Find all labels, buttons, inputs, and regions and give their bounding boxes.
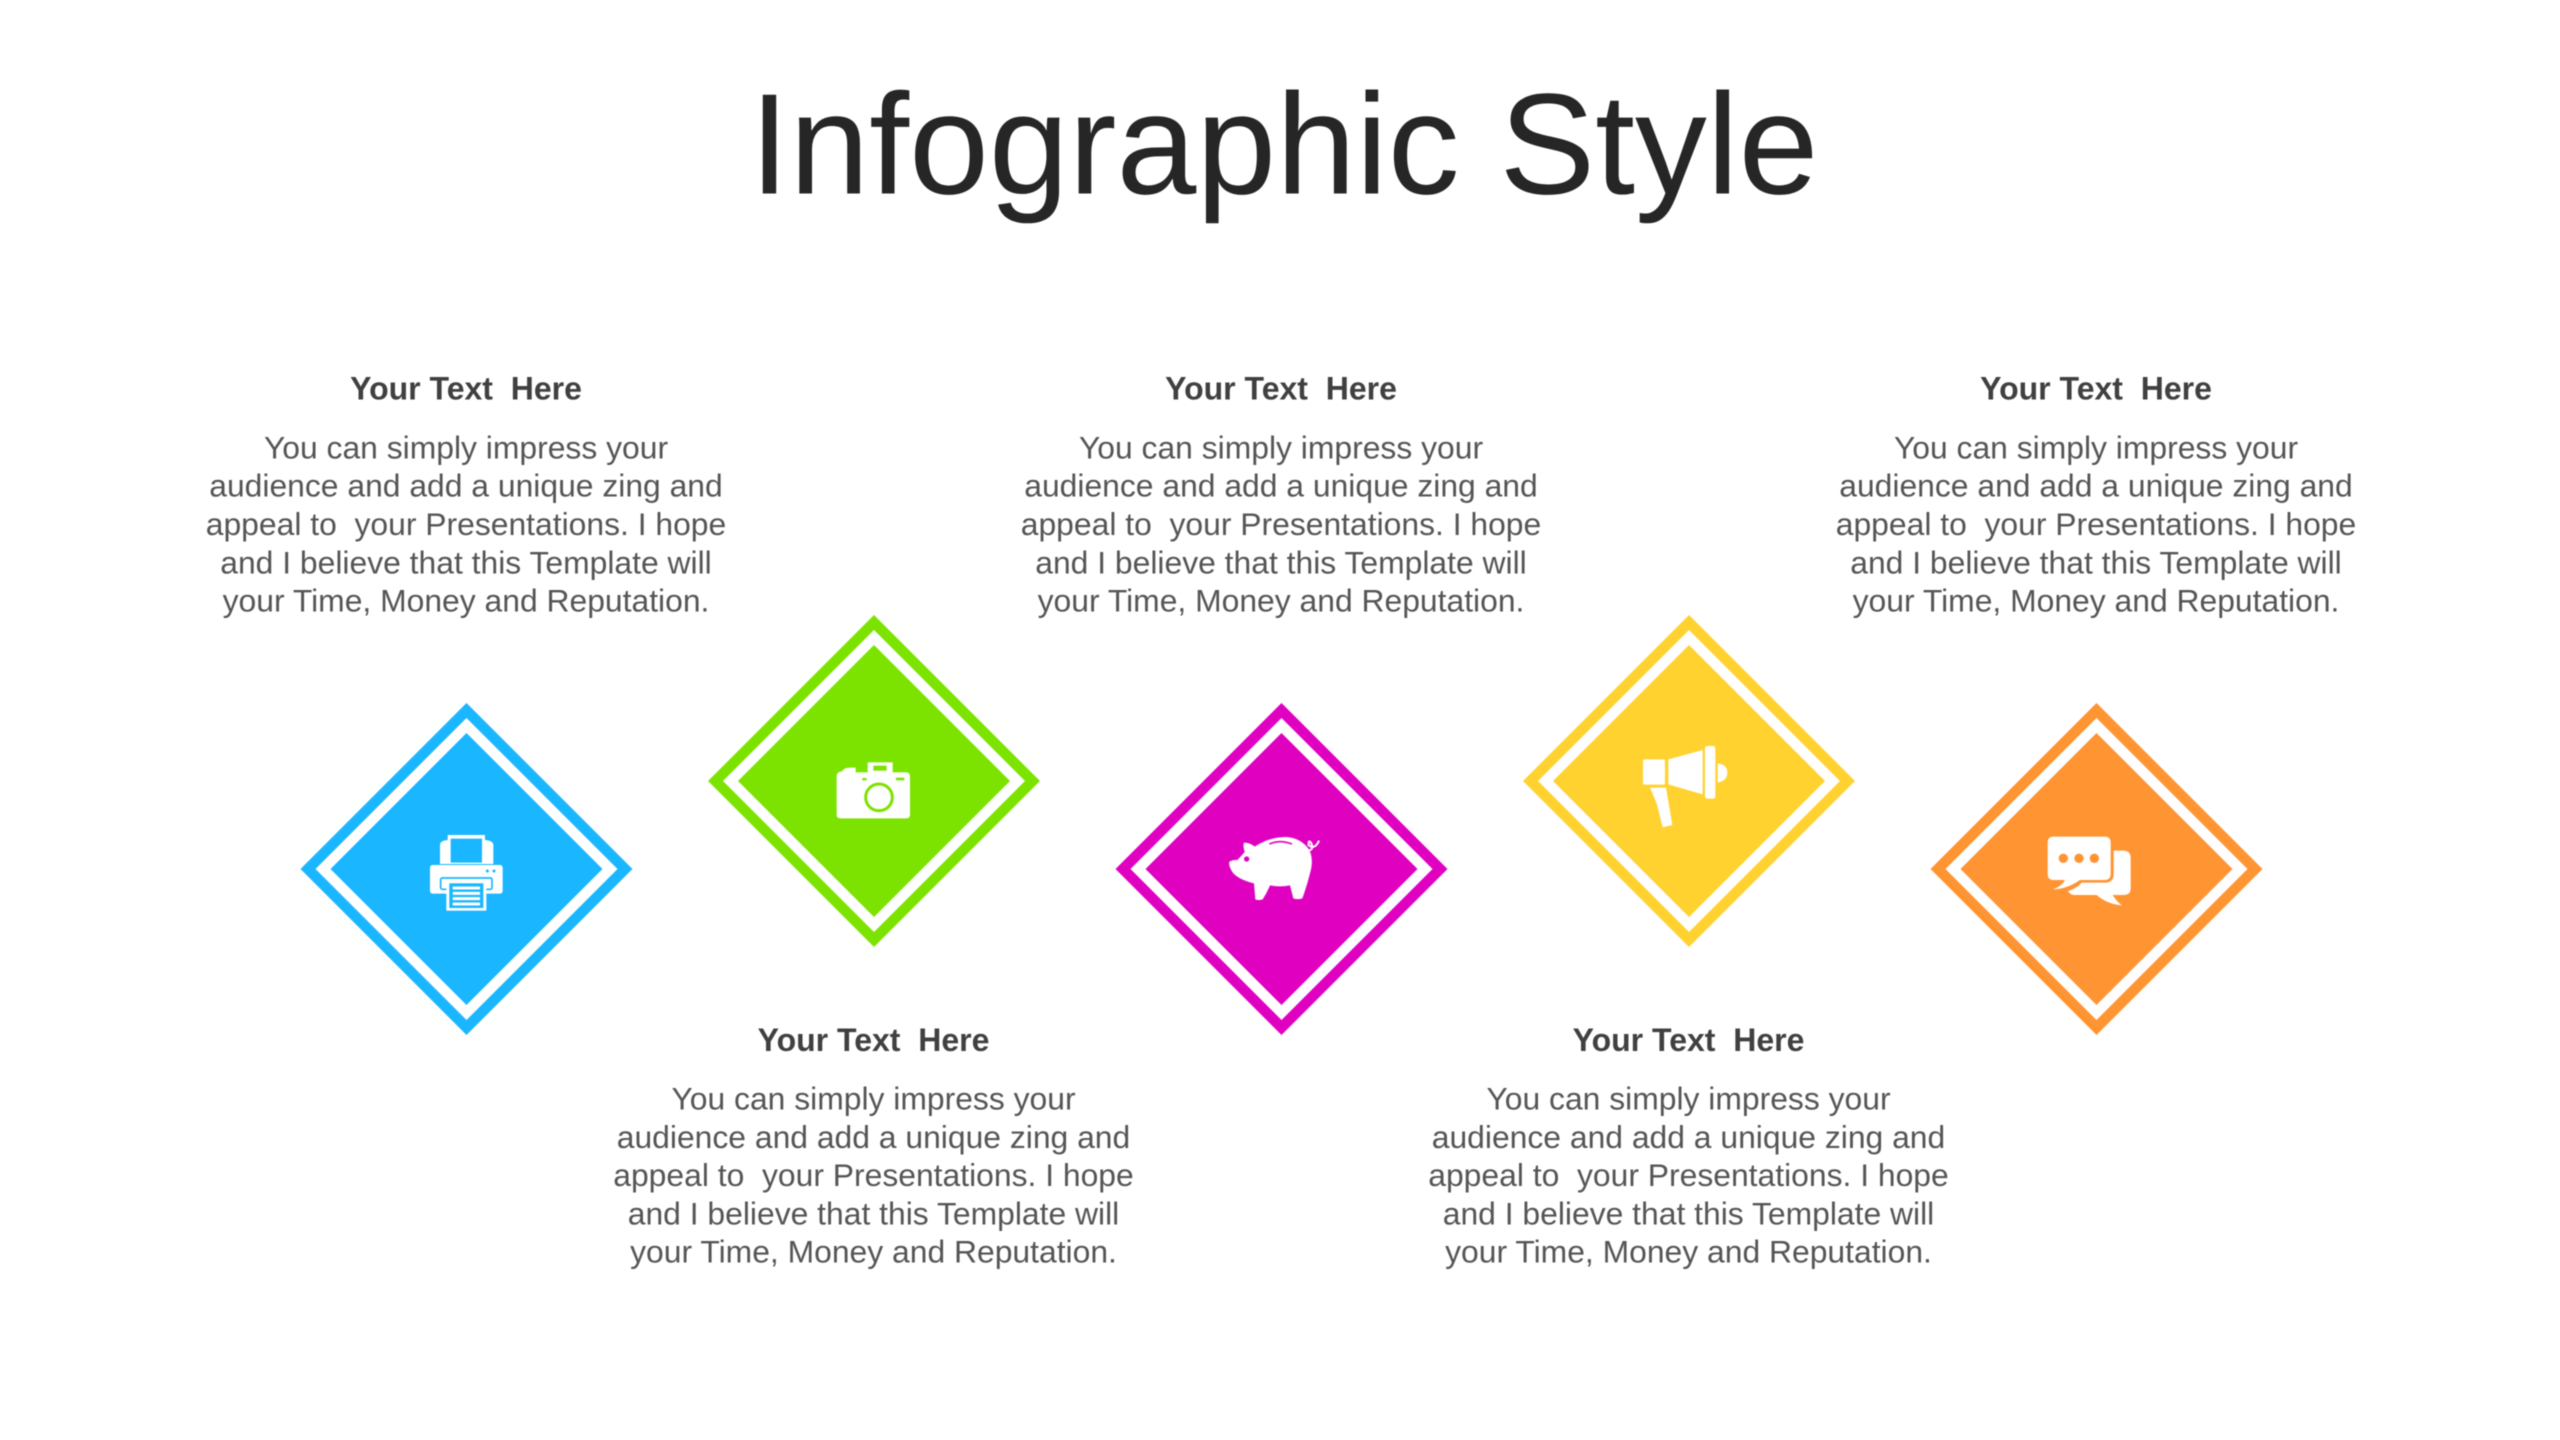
body text 2: You can simply impress your xyxy=(671,1080,1076,1116)
icon: chat bubbles xyxy=(2048,837,2131,905)
panel: text block 1 xyxy=(206,370,726,618)
diamond: orange xyxy=(1930,703,2262,1035)
body text 5 xyxy=(1836,430,2356,618)
body text 2: audience and add a unique zing and xyxy=(617,1119,1130,1155)
heading 5: Your Text Here xyxy=(1980,370,2212,406)
body text 3: your Time, Money and Reputation. xyxy=(1038,582,1524,618)
icon: megaphone xyxy=(1643,746,1727,827)
panel: text block 5 xyxy=(1836,370,2356,618)
diamond: magenta xyxy=(1116,703,1448,1035)
body text 4: and I believe that this Template will xyxy=(1443,1196,1934,1232)
diamond: blue xyxy=(300,703,632,1035)
body text 5: You can simply impress your xyxy=(1894,430,2298,466)
body text 4: appeal to your Presentations. I hope xyxy=(1428,1157,1949,1193)
heading 1: Your Text Here xyxy=(350,370,582,406)
body text 3: and I believe that this Template will xyxy=(1035,544,1527,580)
body text 2 xyxy=(613,1080,1134,1270)
body text 4: audience and add a unique zing and xyxy=(1432,1119,1945,1155)
body text 5: and I believe that this Template will xyxy=(1850,544,2342,580)
body text 2: and I believe that this Template will xyxy=(628,1196,1119,1232)
body text 2: your Time, Money and Reputation. xyxy=(630,1234,1117,1270)
body text 1: You can simply impress your xyxy=(264,430,668,466)
body text 5: your Time, Money and Reputation. xyxy=(1853,582,2339,618)
body text 4 xyxy=(1428,1080,1949,1270)
heading 4: Your Text Here xyxy=(1573,1022,1804,1058)
heading 3: Your Text Here xyxy=(1165,370,1397,406)
panel: text block 3 xyxy=(1021,370,1541,618)
title: Infographic Style xyxy=(750,64,1818,224)
panel: text block 4 xyxy=(1428,1022,1949,1270)
body text 1 xyxy=(206,430,726,618)
body text 3: audience and add a unique zing and xyxy=(1024,468,1538,504)
body text 4: You can simply impress your xyxy=(1486,1080,1891,1116)
body text 3: appeal to your Presentations. I hope xyxy=(1021,506,1541,542)
body text 1: and I believe that this Template will xyxy=(220,544,712,580)
body text 1: audience and add a unique zing and xyxy=(209,468,723,504)
panel: text block 2 xyxy=(613,1022,1134,1270)
diamond: green xyxy=(708,615,1040,947)
body text 3: You can simply impress your xyxy=(1079,430,1483,466)
body text 3 xyxy=(1021,430,1541,618)
body text 1: your Time, Money and Reputation. xyxy=(223,582,709,618)
body text 5: appeal to your Presentations. I hope xyxy=(1836,506,2356,542)
body text 2: appeal to your Presentations. I hope xyxy=(613,1157,1134,1193)
heading 2: Your Text Here xyxy=(758,1022,989,1058)
icon: camera xyxy=(837,762,910,818)
icon: piggy bank xyxy=(1229,837,1319,900)
icon: printer xyxy=(430,835,503,911)
body text 1: appeal to your Presentations. I hope xyxy=(206,506,726,542)
diamond: yellow xyxy=(1523,615,1855,947)
body text 5: audience and add a unique zing and xyxy=(1839,468,2353,504)
body text 4: your Time, Money and Reputation. xyxy=(1445,1234,1932,1270)
